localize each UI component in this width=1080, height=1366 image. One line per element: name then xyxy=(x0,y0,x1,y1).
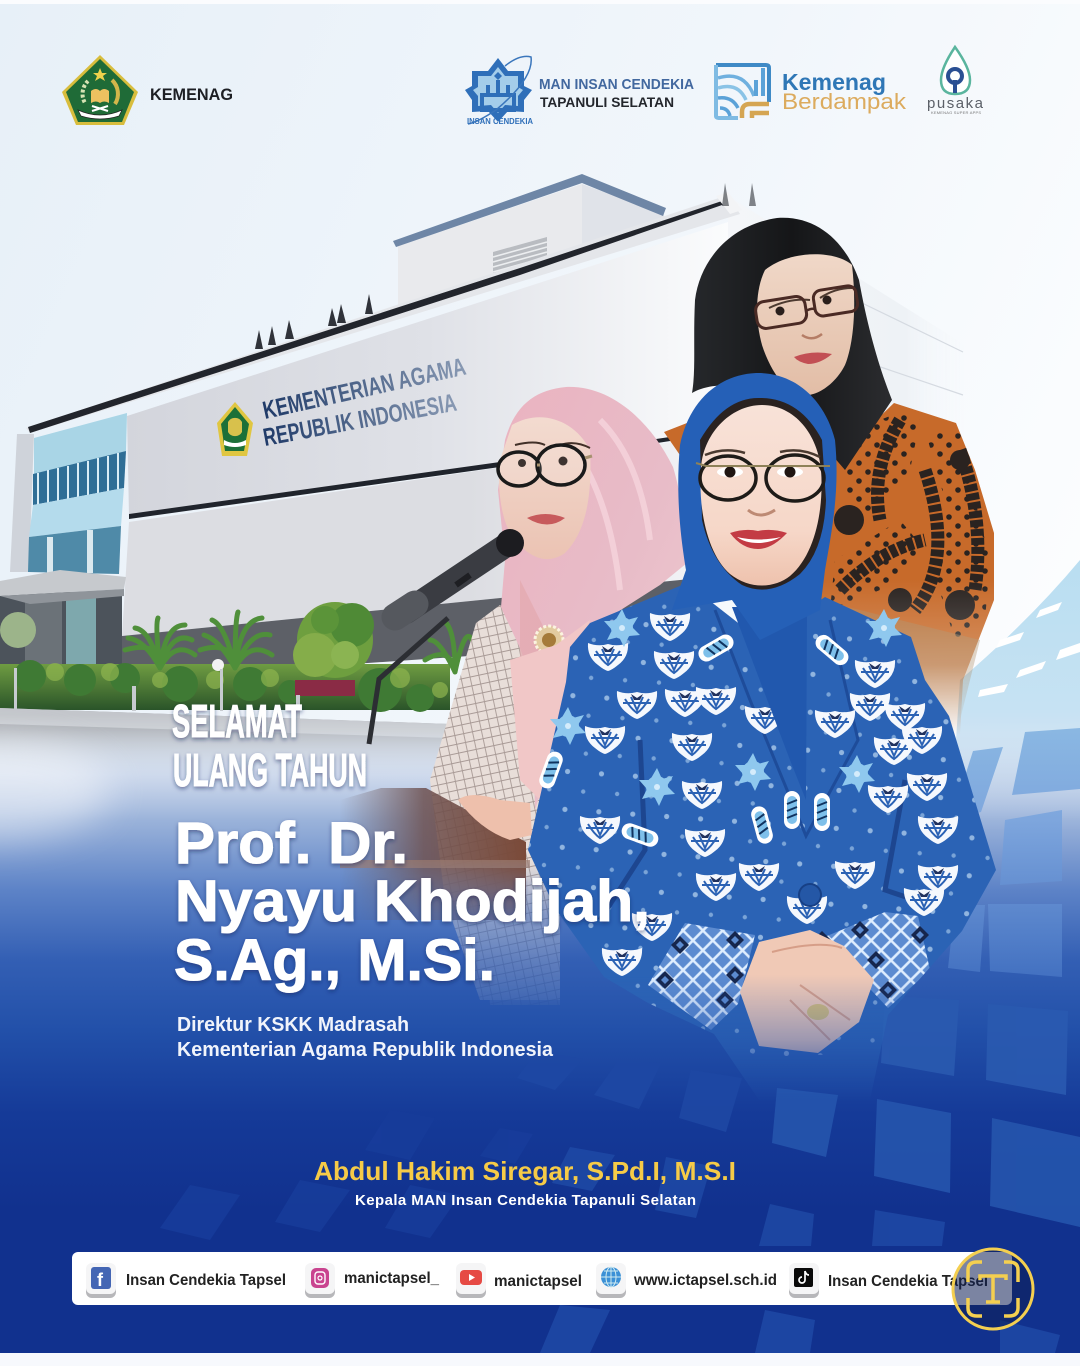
batik blazer xyxy=(520,580,1000,1100)
plaid jacket xyxy=(430,605,560,1000)
logo: MAN Insan Cendekia xyxy=(465,56,533,126)
website: www.ictapsel.sch.id xyxy=(633,1272,777,1289)
logo: pusaka xyxy=(927,47,984,115)
main face xyxy=(696,405,830,586)
instagram: manictapsel_ xyxy=(344,1270,440,1287)
tiktok xyxy=(789,1263,988,1298)
scan badge xyxy=(953,1249,1033,1329)
honoree name: Prof. Dr. xyxy=(175,811,408,876)
left white glow xyxy=(0,740,110,840)
greeting heading: SELAMAT xyxy=(172,695,302,747)
stone wall xyxy=(0,708,446,762)
main facade xyxy=(26,192,742,636)
honoree name: Nyayu Khodijah, xyxy=(175,869,650,934)
instagram xyxy=(305,1263,440,1298)
black hijab xyxy=(692,218,892,470)
KEMENAG label: KEMENAG xyxy=(150,86,233,104)
top edge strip xyxy=(0,0,1080,4)
honoree position xyxy=(177,1014,554,1061)
blue hijab xyxy=(672,373,837,640)
MAN IC name: TAPANULI SELATAN xyxy=(540,94,674,110)
logo: Kemenag pentagon xyxy=(62,55,138,125)
face back xyxy=(754,254,859,395)
pink scarf xyxy=(498,387,687,810)
sender: Abdul Hakim Siregar, S.Pd.I, M.S.I xyxy=(314,1156,736,1186)
tile grid pattern xyxy=(160,560,1080,1353)
sender xyxy=(314,1156,736,1209)
facebook: Insan Cendekia Tapsel xyxy=(126,1272,286,1289)
sign text xyxy=(262,358,466,446)
building photo xyxy=(0,174,965,790)
woman in black hijab and orange batik xyxy=(664,218,994,735)
MAN IC name xyxy=(539,76,694,110)
side wall xyxy=(728,196,965,560)
greeting heading xyxy=(172,695,367,796)
microphone xyxy=(369,529,524,744)
bottom edge strip xyxy=(0,1353,1080,1366)
hedge and plants xyxy=(0,602,472,723)
honoree name: S.Ag., M.Si. xyxy=(174,928,495,993)
orange batik jacket xyxy=(664,403,994,735)
podium xyxy=(340,788,560,1005)
logo: pusaka: pusaka xyxy=(927,95,984,112)
logo: Kemenag Berdampak icon xyxy=(716,65,769,118)
youtube xyxy=(456,1263,582,1298)
sign text: REPUBLIK INDONESIA xyxy=(261,389,459,452)
honoree position: Direktur KSKK Madrasah xyxy=(177,1014,409,1036)
window bands xyxy=(10,413,127,574)
main woman in blue batik xyxy=(520,373,1000,1100)
greeting heading: ULANG TAHUN xyxy=(173,744,367,796)
logo: MAN Insan Cendekia: INSAN CENDEKIA xyxy=(467,116,533,126)
MAN IC name: MAN INSAN CENDEKIA xyxy=(539,76,694,93)
logo: pusaka: KEMENAG SUPER APPS xyxy=(931,110,981,115)
facebook xyxy=(86,1263,286,1298)
roof spikes xyxy=(255,183,756,349)
base wall xyxy=(122,580,683,664)
sign text: KEMENTERIAN AGAMA xyxy=(260,353,468,425)
header logos xyxy=(62,47,984,126)
palms xyxy=(125,612,472,672)
lower scarf xyxy=(510,620,590,800)
sender: Kepala MAN Insan Cendekia Tapanuli Selatan xyxy=(355,1192,696,1209)
neck scarf xyxy=(732,607,807,800)
entrance canopy xyxy=(0,570,126,668)
Kemenag Berdampak text xyxy=(782,69,907,114)
pink hijab face xyxy=(498,417,592,559)
youtube: manictapsel xyxy=(494,1273,582,1290)
Kemenag Berdampak text: Berdampak xyxy=(782,89,907,114)
penthouse xyxy=(393,174,666,305)
honoree name xyxy=(174,811,650,993)
facebook: f xyxy=(97,1270,104,1290)
woman in pink hijab at podium xyxy=(340,387,687,1005)
Kemenag Berdampak text: Kemenag xyxy=(782,69,886,95)
website xyxy=(596,1263,777,1298)
brooch xyxy=(535,626,563,654)
hands xyxy=(458,795,532,840)
social media bar xyxy=(72,1252,1012,1305)
building sign lettering xyxy=(217,353,468,456)
hands xyxy=(740,930,874,1053)
tiktok: Insan Cendekia Tapsel xyxy=(828,1273,988,1290)
decorative blue fade xyxy=(0,730,1080,1366)
sleeve lattice xyxy=(648,923,755,1030)
honoree position: Kementerian Agama Republik Indonesia xyxy=(177,1039,554,1061)
sign logo xyxy=(217,402,253,456)
